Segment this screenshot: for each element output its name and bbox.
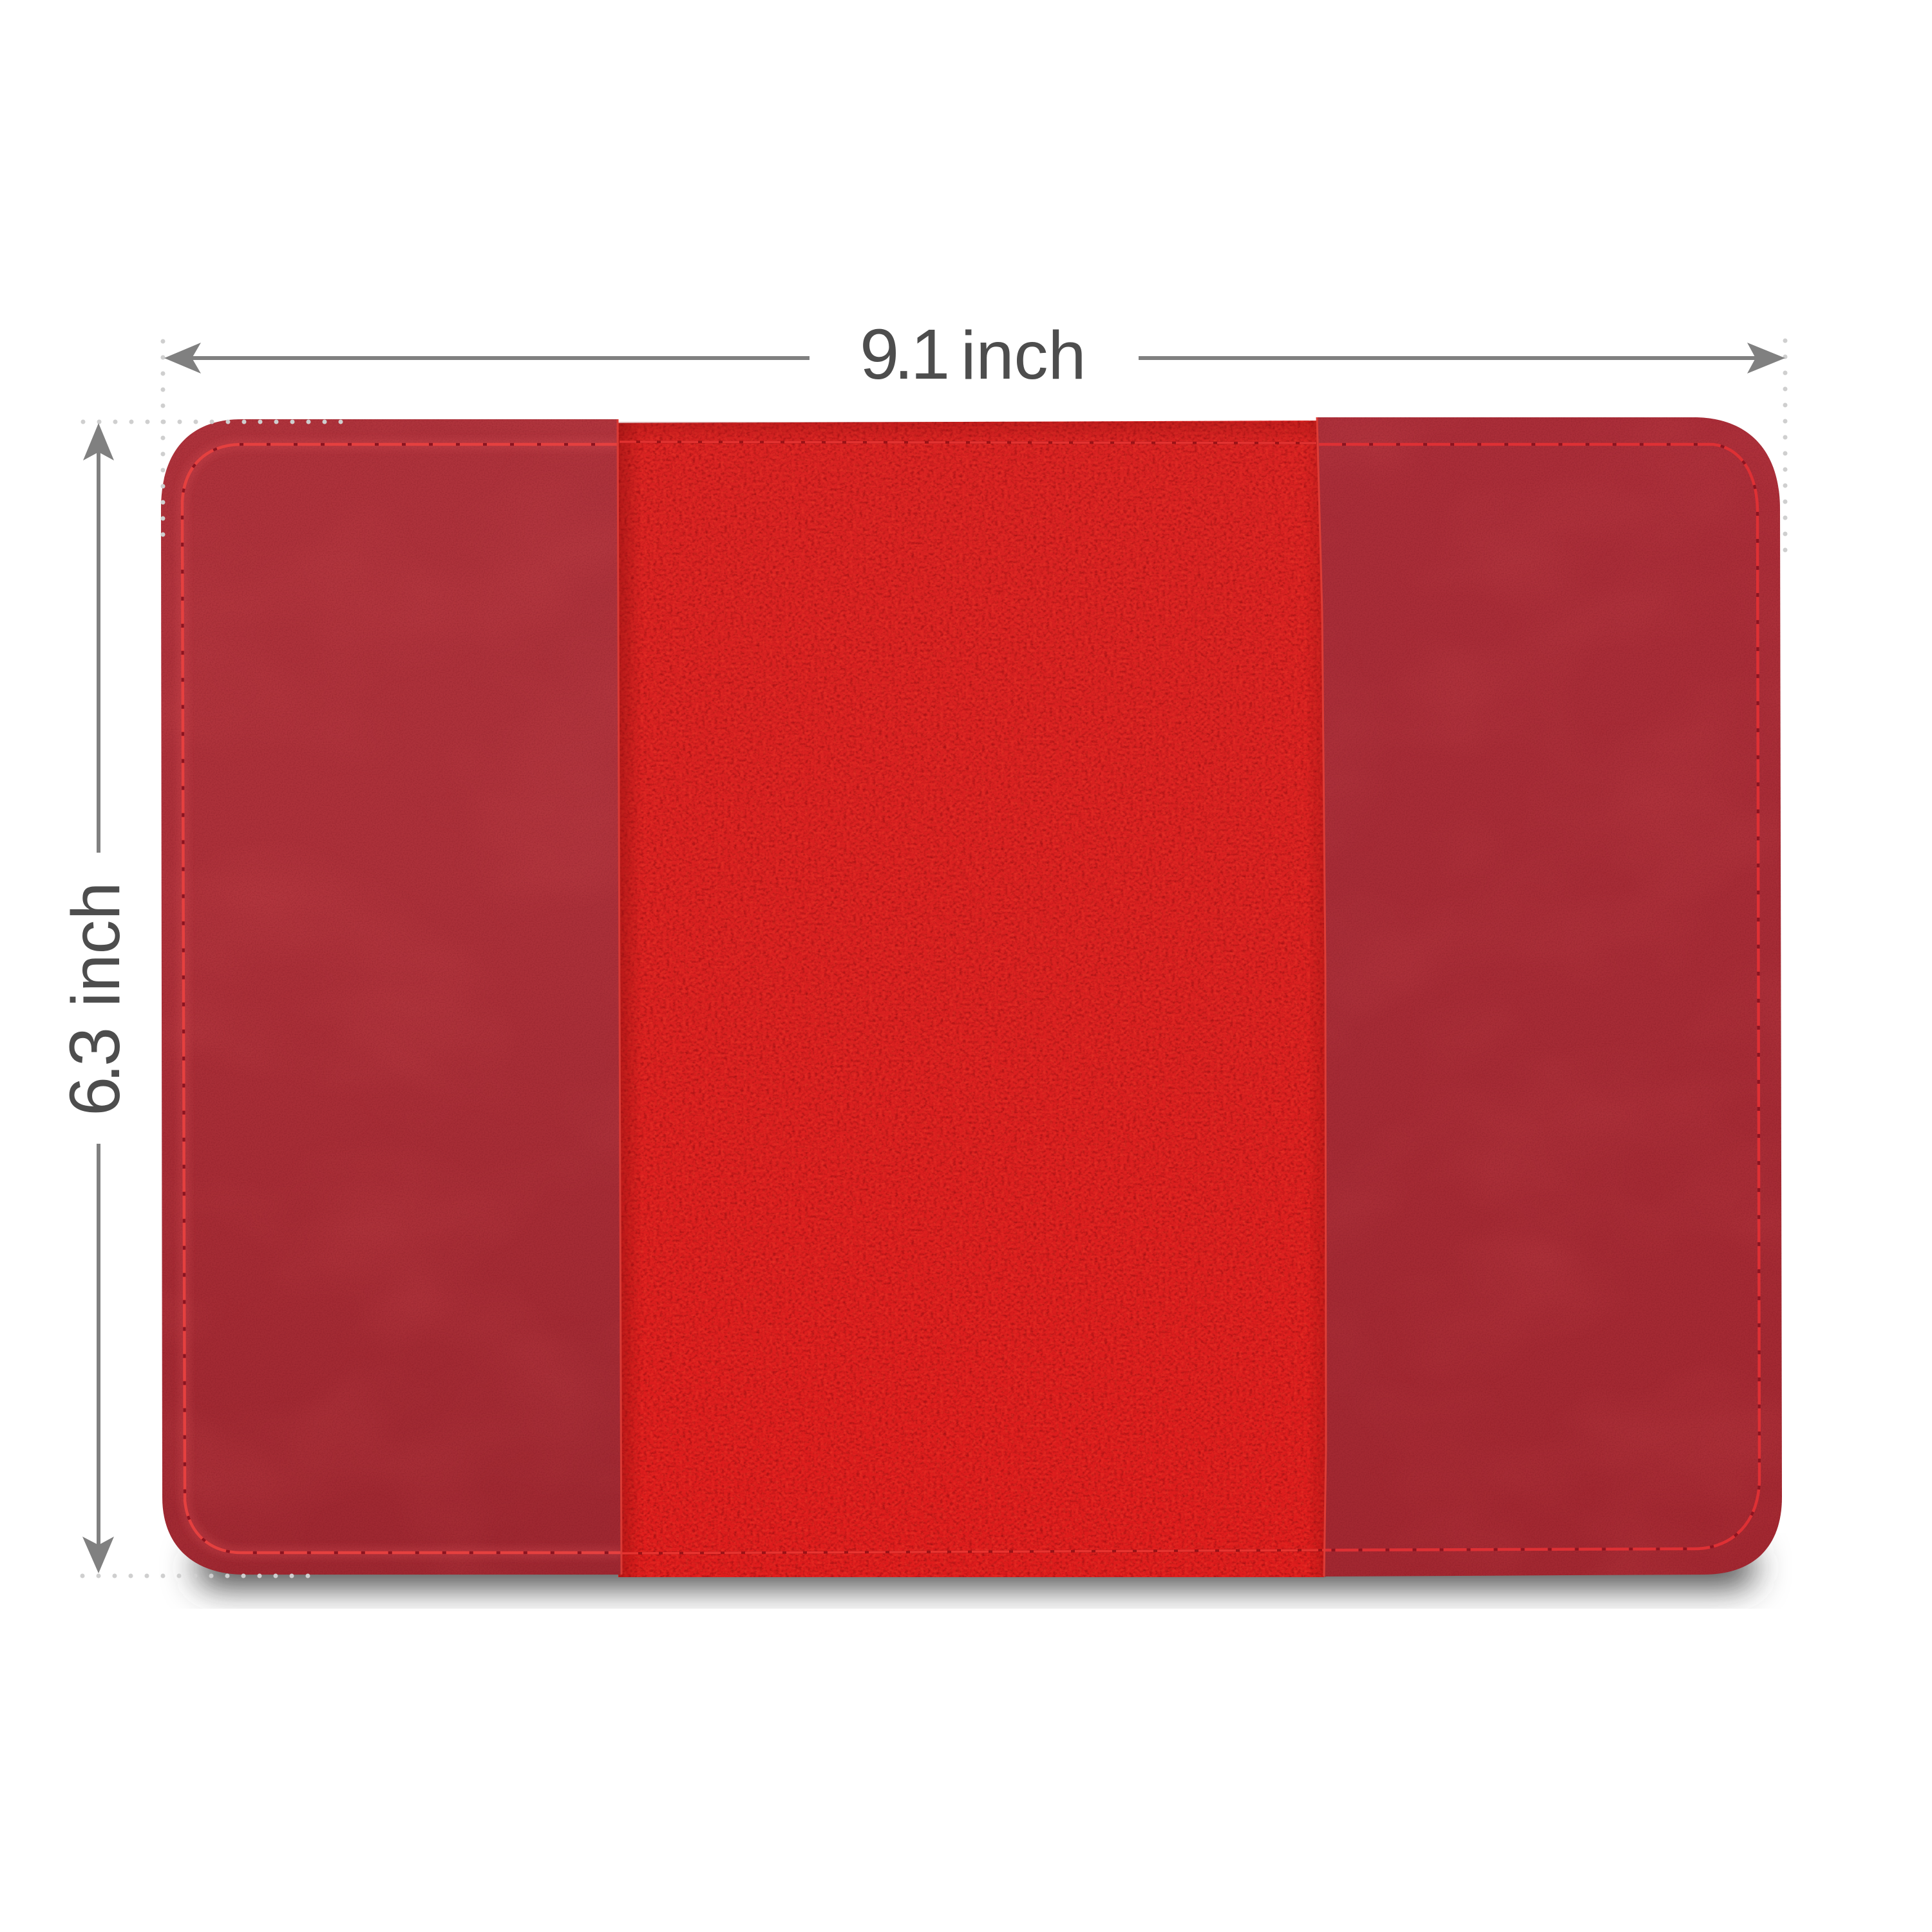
width dimension arrow: left segment: [164, 343, 810, 374]
width label: 9.1: [860, 315, 950, 394]
center red suede panel: [615, 421, 1326, 1577]
wallet drop shadow: [196, 1549, 1755, 1586]
height dimension arrow: top segment: [83, 423, 114, 853]
height label: 6.3: [55, 1027, 135, 1116]
width dimension arrow: right segment: [1139, 343, 1785, 374]
height label: inch: [58, 882, 134, 1007]
open wallet: [161, 417, 1782, 1577]
right leather flap: [1317, 417, 1782, 1577]
left leather flap: [161, 419, 621, 1575]
dotted guide lines: [82, 341, 1785, 1576]
width label: inch: [961, 317, 1086, 393]
height dimension arrow: bottom segment: [82, 1144, 114, 1573]
